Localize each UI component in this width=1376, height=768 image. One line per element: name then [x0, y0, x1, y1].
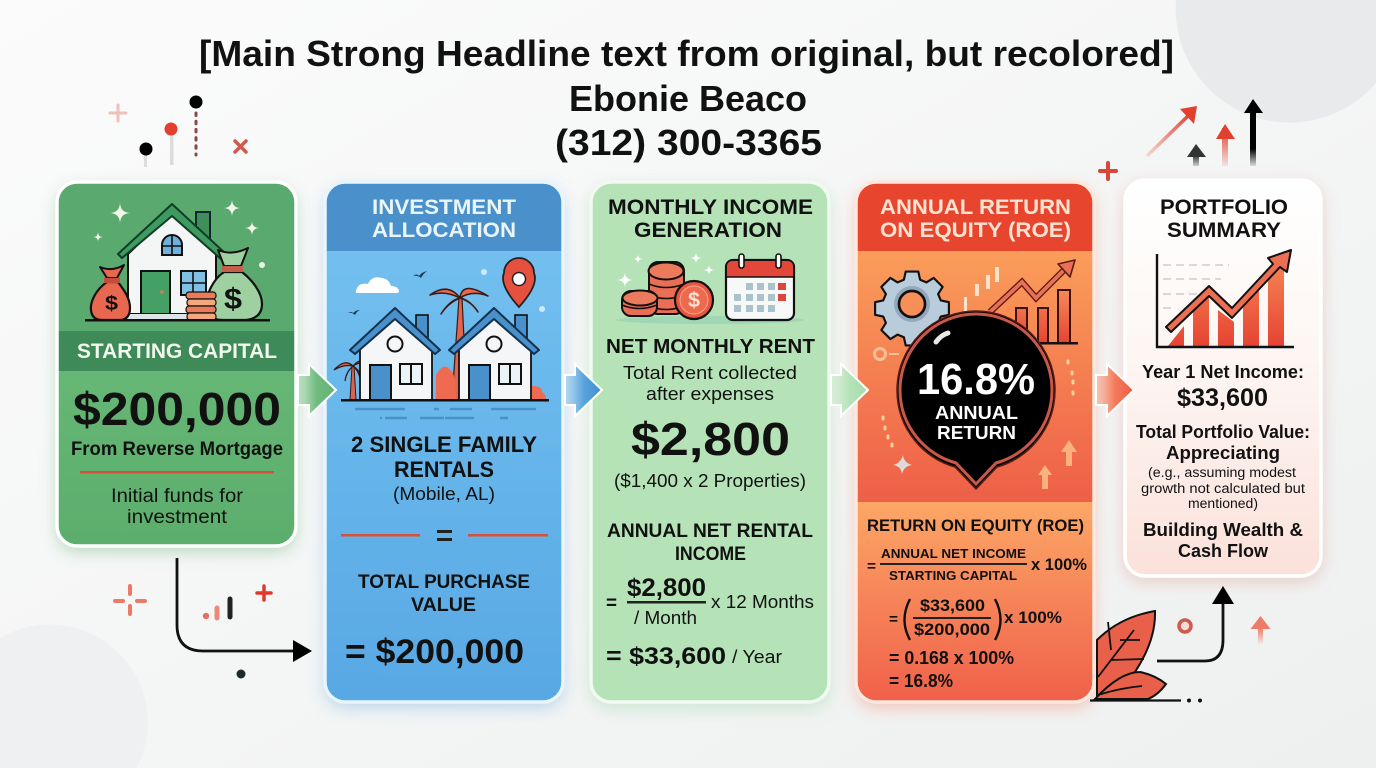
text: per property breakdown: ($1,400 x 2 Properties) — [614, 471, 806, 491]
text: total portfolio value — [1136, 422, 1310, 463]
text: growth note: growth not calculated but — [1141, 481, 1305, 496]
formula: roe substitution: $33,600 — [920, 596, 985, 615]
formula: roe result: = 0.168 x 100% — [889, 648, 1014, 668]
text: initial funds — [111, 486, 244, 528]
arrow: card 1 to card 2 — [298, 364, 336, 416]
text: 2 single family rentals — [351, 432, 537, 504]
formula: monthly to annual: x 12 Months — [711, 592, 814, 612]
decoration: growth arrows top right — [1100, 99, 1263, 179]
heading: annual return on equity — [856, 182, 1094, 251]
formula: monthly to annual: $2,800 — [627, 574, 706, 602]
formula: roe result — [889, 648, 1014, 691]
icon: coins and calendar — [616, 252, 804, 324]
heading band: starting capital — [57, 331, 296, 371]
heading: investment allocation: INVESTMENT — [372, 196, 516, 219]
text: from reverse mortgage: From Reverse Mortgage — [71, 439, 283, 460]
formula: roe definition: STARTING CAPITAL — [889, 568, 1017, 583]
text: net monthly rent: after expenses — [646, 384, 774, 404]
formula: roe definition: = — [867, 558, 876, 575]
heading band: starting capital: STARTING CAPITAL — [77, 340, 277, 363]
result: $33,600 per year — [606, 643, 782, 670]
heading: monthly income generation — [608, 196, 813, 242]
text: building wealth and cash flow: Cash Flow — [1178, 541, 1269, 561]
result: $33,600 per year: / Year — [732, 647, 782, 667]
text: annual net rental income: ANNUAL NET RENTAL — [607, 521, 813, 542]
chart: portfolio growth — [1157, 250, 1294, 347]
decoration: top left pins and marks — [110, 96, 246, 167]
icon: two rental houses with palm and pin — [334, 258, 549, 418]
panel 1 top background — [57, 182, 296, 331]
badge: 16.8% annual return: 16.8% — [917, 355, 1035, 404]
text: growth note — [1141, 465, 1305, 511]
text: annual net rental income: INCOME — [675, 544, 746, 565]
title: (312) 300-3365 — [555, 122, 822, 163]
panel: annual return on equity — [856, 182, 1094, 702]
heading: return on equity: RETURN ON EQUITY (ROE) — [867, 516, 1084, 535]
formula: monthly to annual: / Month — [634, 608, 697, 628]
amount: = $200,000: = $200,000 — [345, 633, 524, 671]
icon: house with money bags — [85, 199, 270, 322]
formula: roe substitution — [889, 596, 1062, 640]
text: initial funds: investment — [127, 507, 228, 528]
arrow: connector from starting capital to total purchase value — [177, 558, 312, 662]
text: total purchase value: VALUE — [411, 595, 476, 616]
text: building wealth and cash flow: Building Wealth & — [1143, 520, 1303, 540]
formula: roe definition: x 100% — [1031, 555, 1087, 574]
formula: roe substitution: $200,000 — [914, 620, 990, 639]
text: total portfolio value: Total Portfolio Value: — [1136, 422, 1310, 442]
text: annual net rental income — [607, 521, 813, 565]
panel: monthly income generation — [591, 182, 829, 702]
decorative circle: bottom left — [0, 624, 148, 768]
formula: roe substitution: = — [889, 611, 898, 628]
title: Ebonie Beaco — [569, 78, 807, 119]
decorative circle: top right — [1176, 0, 1376, 123]
text: growth note: mentioned) — [1188, 496, 1258, 511]
formula: roe definition — [867, 546, 1087, 583]
formula: roe definition: ANNUAL NET INCOME — [881, 546, 1026, 561]
text: total portfolio value: Appreciating — [1166, 443, 1280, 463]
text: total purchase value: TOTAL PURCHASE — [358, 572, 530, 593]
formula band background — [856, 502, 1094, 702]
text: year 1 net income — [1142, 362, 1304, 412]
amount: $2,800: $2,800 — [631, 413, 790, 465]
text: 2 single family rentals: 2 SINGLE FAMILY — [351, 432, 537, 457]
text: 2 single family rentals: (Mobile, AL) — [393, 484, 495, 504]
formula: roe result: = 16.8% — [889, 671, 953, 691]
heading: portfolio summary — [1160, 196, 1288, 242]
heading: portfolio summary: PORTFOLIO — [1160, 196, 1288, 219]
heading: portfolio summary: SUMMARY — [1167, 219, 1281, 242]
result: $33,600 per year: = $33,600 — [606, 643, 726, 670]
text: net monthly rent: NET MONTHLY RENT — [606, 336, 815, 358]
text: net monthly rent — [606, 336, 815, 404]
heading: investment allocation: ALLOCATION — [372, 219, 516, 242]
heading: investment allocation — [325, 182, 563, 251]
text: 2 single family rentals: RENTALS — [394, 457, 494, 482]
panel: starting capital — [57, 182, 296, 546]
arrow: connector to portfolio summary — [1157, 586, 1234, 661]
formula: monthly to annual — [606, 574, 814, 628]
icon: gear and growth chart — [874, 260, 1078, 489]
arrow: card 4 to card 5 — [1096, 364, 1134, 416]
badge: 16.8% annual return — [897, 311, 1055, 489]
icon: coins and calendar: $ — [688, 289, 700, 312]
decoration: bottom left marks — [115, 586, 271, 678]
heading: annual return on equity: ON EQUITY (ROE) — [880, 219, 1071, 242]
icon: house with money bags: $ — [105, 293, 118, 315]
formula: roe substitution: x 100% — [1004, 608, 1062, 627]
text: total purchase value — [358, 572, 530, 616]
formula: monthly to annual: = — [606, 593, 617, 614]
text: net monthly rent: Total Rent collected — [623, 363, 797, 383]
title: [Main Strong Headline text from original, but recolored] — [199, 33, 1174, 74]
icon: house with money bags: $ — [224, 283, 242, 316]
text: year 1 net income: Year 1 Net Income: — [1142, 362, 1304, 382]
illustration background — [856, 251, 1094, 502]
title — [199, 33, 1174, 163]
equals divider — [341, 530, 548, 541]
decoration: ring and up arrow — [1179, 616, 1270, 645]
amount: $200,000: $200,000 — [73, 383, 281, 435]
icon: leaf — [1090, 611, 1202, 702]
badge: 16.8% annual return: RETURN — [937, 423, 1016, 443]
heading: monthly income generation: MONTHLY INCOME — [608, 196, 813, 219]
text: growth note: (e.g., assuming modest — [1148, 465, 1296, 480]
panel: investment allocation — [325, 182, 563, 702]
text: building wealth and cash flow — [1143, 520, 1303, 561]
text: year 1 net income: $33,600 — [1177, 384, 1268, 412]
heading: annual return on equity: ANNUAL RETURN — [880, 196, 1071, 219]
panel: portfolio summary — [1125, 180, 1321, 576]
heading: monthly income generation: GENERATION — [634, 219, 782, 242]
arrow: card 3 to card 4 — [831, 364, 868, 416]
badge: 16.8% annual return: ANNUAL — [935, 403, 1018, 423]
text: initial funds: Initial funds for — [111, 486, 244, 507]
arrow: card 2 to card 3 — [565, 364, 602, 416]
